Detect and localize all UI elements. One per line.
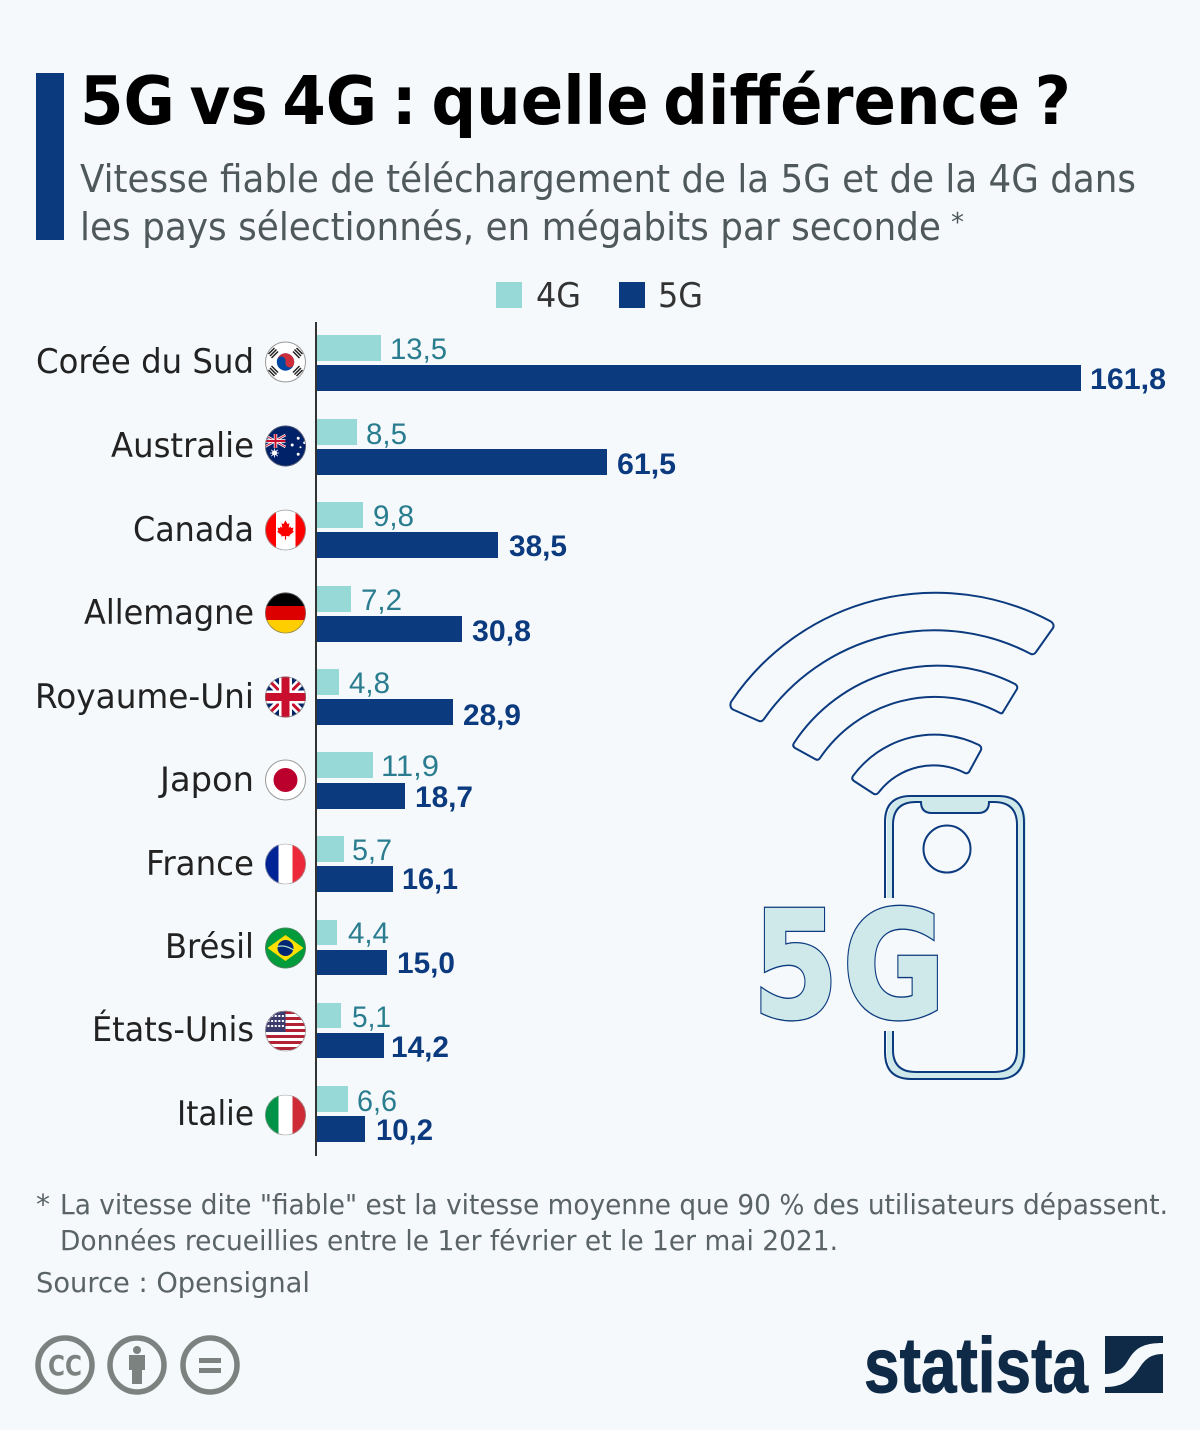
legend xyxy=(496,276,703,316)
icon: no derivatives xyxy=(183,1338,237,1392)
icon: smartphone xyxy=(885,796,1026,1079)
row: Japon: 11,9 xyxy=(381,750,439,783)
row: Royaume-Uni: 4,8 xyxy=(349,667,390,700)
row: Italie: 10,2 xyxy=(376,1114,433,1147)
subtitle: * xyxy=(951,208,964,238)
icon: cc xyxy=(38,1338,92,1392)
row: Canada: 9,8 xyxy=(373,500,414,533)
icon: 5G label: 5 xyxy=(753,880,838,1052)
icon: 5G label: G xyxy=(843,880,945,1052)
row: États-Unis: 14,2 xyxy=(391,1031,449,1064)
row: France: 5,7 xyxy=(352,834,392,867)
icon: flag South Korea xyxy=(264,341,306,383)
row: Corée du Sud: 161,8 xyxy=(1090,363,1166,396)
row: Brésil: 4,4 xyxy=(348,917,389,950)
icon: flag Canada xyxy=(264,509,306,551)
row: Brésil xyxy=(165,917,455,980)
icon: flag Italy xyxy=(264,1094,306,1136)
accent bar xyxy=(36,73,64,240)
source: Source : Opensignal xyxy=(36,1266,310,1299)
icon: statista mark xyxy=(1105,1336,1163,1393)
row: France: 16,1 xyxy=(402,863,458,896)
footnote: Données recueillies entre le 1er février et le 1er mai 2021. xyxy=(60,1224,838,1257)
row: Allemagne: Allemagne xyxy=(84,593,254,633)
icon: flag United States xyxy=(264,1010,306,1052)
row: Australie: 61,5 xyxy=(617,448,676,481)
footnote xyxy=(36,1188,1168,1257)
row: Allemagne: 30,8 xyxy=(472,615,531,648)
row: France xyxy=(146,834,458,896)
subtitle xyxy=(80,157,1136,249)
legend 4G: 4G xyxy=(536,276,581,316)
row: États-Unis xyxy=(92,1001,449,1064)
row: Japon: Japon xyxy=(158,760,254,800)
legend 4G xyxy=(496,276,581,316)
row: Italie xyxy=(177,1085,433,1147)
statista logo: statista xyxy=(864,1321,1088,1409)
icon: attribution xyxy=(110,1338,164,1392)
row: Canada: 38,5 xyxy=(509,530,567,563)
row: Brésil: 15,0 xyxy=(397,947,455,980)
icon: 5G label xyxy=(753,880,945,1052)
icon: flag Japan xyxy=(266,760,306,800)
legend 5G: 5G xyxy=(658,276,703,316)
subtitle: les pays sélectionnés, en mégabits par seconde xyxy=(80,205,941,249)
row: Brésil: Brésil xyxy=(165,927,254,967)
row: Corée du Sud: Corée du Sud xyxy=(36,342,254,382)
icon: flag Brazil xyxy=(264,927,306,969)
title: 5G vs 4G : quelle différence ? xyxy=(80,62,1071,140)
row: Canada xyxy=(133,500,567,563)
row: Australie: 8,5 xyxy=(366,418,407,451)
footnote: * xyxy=(36,1188,50,1221)
legend 5G xyxy=(619,276,703,316)
row: Japon xyxy=(158,750,473,814)
icon: flag Australia xyxy=(264,425,306,467)
icon: flag Germany xyxy=(264,592,306,634)
row: Italie: Italie xyxy=(177,1094,254,1134)
row: Corée du Sud xyxy=(36,333,1166,396)
axis line xyxy=(315,322,317,1156)
row: Royaume-Uni xyxy=(35,667,521,732)
icon: cc: CC xyxy=(48,1349,82,1382)
bar chart xyxy=(35,322,1166,1156)
row: Royaume-Uni: Royaume-Uni xyxy=(35,677,254,717)
row: Japon: 18,7 xyxy=(415,781,473,814)
icon: 5G label: G xyxy=(843,880,945,1052)
icon: flag United Kingdom xyxy=(264,676,306,718)
row: États-Unis: 5,1 xyxy=(352,1001,391,1034)
row: Corée du Sud: 13,5 xyxy=(390,333,447,366)
subtitle: Vitesse fiable de téléchargement de la 5G et de la 4G dans xyxy=(80,157,1136,201)
row: Australie xyxy=(111,418,676,481)
icon: wifi arcs xyxy=(730,593,1054,794)
row: Allemagne: 7,2 xyxy=(361,584,402,617)
icon: flag France xyxy=(264,843,306,885)
row: Australie: Australie xyxy=(111,426,254,466)
row: Canada: Canada xyxy=(133,510,254,550)
row: Italie: 6,6 xyxy=(357,1085,397,1118)
row: Allemagne xyxy=(84,584,531,648)
icon: 5G label: 5 xyxy=(753,880,838,1052)
row: États-Unis: États-Unis xyxy=(92,1009,254,1050)
row: France: France xyxy=(146,844,254,884)
icon: creative commons xyxy=(38,1338,237,1392)
row: Royaume-Uni: 28,9 xyxy=(463,699,521,732)
